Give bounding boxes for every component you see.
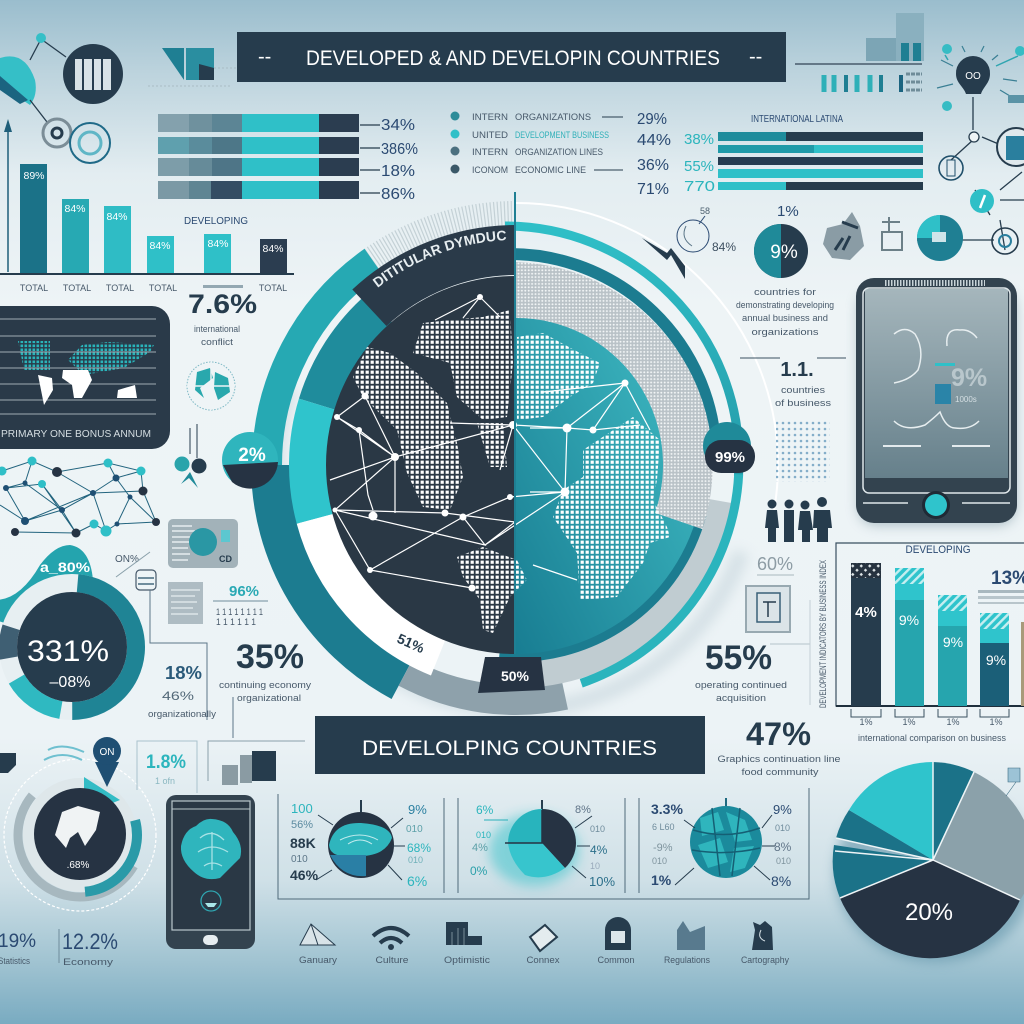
right stacked bar chart: international comparison on business <box>858 733 1006 743</box>
left bar chart: TOTAL <box>259 283 287 293</box>
stat 1.8 percent box <box>137 741 197 793</box>
stacked horizontal bars <box>158 114 418 203</box>
tab 50 percent <box>478 657 545 693</box>
large pie chart: 20% <box>905 899 953 926</box>
left bar chart: 84% <box>149 240 171 252</box>
panel: teal globe with labels: -9% <box>653 842 673 854</box>
right dotted continents <box>517 333 670 600</box>
horizontal striped bars: 770 <box>684 178 715 195</box>
stat 1.1 with dotted square <box>740 358 846 482</box>
icon: folder: Regulations <box>664 955 710 965</box>
title banner: -- <box>749 46 762 68</box>
legend with labels and percentages: ORGANIZATIONS <box>515 112 591 122</box>
small percentage icon row: 58 <box>700 206 710 216</box>
outer thin ring and shadow <box>208 162 824 778</box>
icon: triangle <box>299 924 338 965</box>
pin label: ON <box>100 747 114 758</box>
pin label <box>93 737 121 787</box>
document icon and stat: 1 1 1 1 1 1 1 1 <box>216 607 263 617</box>
stat 18 percent: 46% <box>162 689 194 703</box>
right rings <box>259 216 757 708</box>
paragraph under small pie: organizations <box>752 327 819 337</box>
title banner: DEVELOPED & AND DEVELOPIN COUNTRIES <box>306 47 720 70</box>
document icon and stat: 1 1 1 1 1 1 <box>216 617 256 627</box>
right stacked bar chart: 1% <box>859 717 873 727</box>
horizontal striped bars <box>684 114 923 195</box>
network diagram <box>0 456 160 538</box>
badge 99 percent: 99% <box>715 449 745 466</box>
vertical tiny label: DEVELOPMENT INDICATORS BY BUSINESS INDEX <box>818 560 828 708</box>
top right light bulb and node network <box>917 44 1024 254</box>
legend with labels and percentages: ECONOMIC LINE <box>515 165 586 175</box>
icon: group of people <box>765 497 832 542</box>
legend with labels and percentages: 36% <box>637 157 669 174</box>
stat 35 percent: 35% <box>236 638 304 676</box>
left bar chart: DEVELOPING <box>184 216 248 227</box>
icon: wifi <box>373 928 409 965</box>
top right building chart <box>795 13 924 92</box>
icon: dotted globe <box>187 362 235 410</box>
right stacked bar chart: 9% <box>943 634 963 650</box>
small percentage icon row <box>677 203 963 278</box>
stat 7.6 percent <box>188 289 257 347</box>
stacked horizontal bars: 86% <box>381 186 415 203</box>
panel: teal globe with labels: 8% <box>774 840 792 854</box>
left outer bands <box>185 134 847 796</box>
right stacked bar chart <box>836 543 1024 743</box>
panel: swirl circle <box>290 800 431 889</box>
developing countries banner: DEVELOLPING COUNTRIES <box>362 737 657 760</box>
title banner <box>237 32 786 82</box>
comparison panel frame <box>278 788 809 899</box>
panel: teal globe with labels: 010 <box>775 823 790 833</box>
legend with labels and percentages: INTERN <box>472 147 508 157</box>
icon: wifi: Culture <box>376 955 408 965</box>
document icon and stat <box>168 582 268 627</box>
icon: ticket <box>526 925 560 965</box>
left bar chart: TOTAL <box>20 283 48 293</box>
right stacked bar chart: 1% <box>989 717 1003 727</box>
icon: head silhouette <box>741 921 789 965</box>
panel: teal globe with labels: 010 <box>652 856 667 866</box>
stat 47 percent: Graphics continuation line <box>718 754 840 764</box>
left bar chart: 84% <box>262 243 284 255</box>
tablet device <box>856 278 1017 525</box>
title banner: -- <box>258 46 271 68</box>
panel: teal globe with labels: 9% <box>773 802 792 817</box>
bottom icon row <box>299 917 789 965</box>
stat 7.6 percent: conflict <box>201 337 234 347</box>
icon: ticket: Connex <box>526 955 560 965</box>
icon: triangle: Ganuary <box>299 955 338 965</box>
grey rock icon <box>823 212 864 260</box>
donut chart 331 percent: a_80% <box>40 559 91 575</box>
bottom left stats: 12.2% <box>62 929 118 954</box>
card icon: CD <box>219 554 232 564</box>
donut chart 331 percent: 331% <box>27 635 109 668</box>
paragraph under small pie <box>736 287 834 337</box>
stat 18 percent: 18% <box>165 663 202 683</box>
stat 1.8 percent box: 1.8% <box>146 752 186 773</box>
panel: swirl circle: 010 <box>291 854 308 865</box>
right stacked bar chart: DEVELOPING <box>906 544 970 556</box>
dark world map panel <box>0 306 170 449</box>
center divider <box>514 192 516 654</box>
stat 18 percent <box>148 663 217 719</box>
bottom left stats <box>0 929 118 967</box>
bolt icon <box>642 238 685 279</box>
icon cluster: top left globe and nodes <box>0 33 123 163</box>
stat 60 percent frame icon: 60% <box>757 554 793 574</box>
icon: speech bubbles <box>174 424 206 488</box>
panel: teal globe with labels: 8% <box>771 873 791 889</box>
donut chart 331 percent <box>0 545 146 721</box>
panel: pie chart with labels: 4% <box>472 842 488 854</box>
small percentage icon row: 84% <box>712 240 736 254</box>
stat 7.6 percent: 7.6% <box>188 289 257 319</box>
card icon <box>168 519 238 568</box>
dark left half disc <box>326 276 515 654</box>
top right light bulb and node network: OO <box>965 71 981 82</box>
donut chart 331 percent: –08% <box>50 674 90 691</box>
tablet device: 9% <box>951 364 987 392</box>
panel: pie chart with labels: 0% <box>470 864 488 878</box>
badge 2 percent <box>222 432 278 489</box>
left tick arc <box>368 213 512 261</box>
left dotted continents <box>353 310 527 633</box>
stat 1.1 with dotted square: 1.1. <box>780 359 814 381</box>
stat 35 percent <box>219 638 312 738</box>
panel: teal globe with labels: 010 <box>776 856 791 866</box>
panel: pie chart with labels: 10 <box>590 861 600 871</box>
right stacked bar chart: 9% <box>899 612 919 628</box>
left bar chart: 84% <box>64 203 86 215</box>
panel: swirl circle: 56% <box>291 819 313 831</box>
developing countries banner <box>315 716 705 774</box>
connector icon and pie <box>882 215 963 261</box>
badge 99 percent <box>703 422 755 473</box>
icon: small teal folded shape <box>148 48 236 86</box>
icon: lock <box>598 917 634 965</box>
dark world map panel: PRIMARY ONE BONUS ANNUM <box>1 428 151 440</box>
left bar chart: 84% <box>106 211 128 223</box>
paragraph under small pie: demonstrating developing <box>736 300 834 310</box>
legend with labels and percentages: 44% <box>637 132 671 149</box>
panel: pie chart with labels: 4% <box>590 843 608 857</box>
panel: swirl circle: 46% <box>290 867 319 883</box>
right stacked bar chart: 1% <box>902 717 916 727</box>
legend with labels and percentages: DEVELOPMENT BUSINESS <box>515 130 609 140</box>
legend with labels and percentages: ICONOM <box>472 165 508 175</box>
panel: teal globe with labels: 3.3% <box>651 801 683 817</box>
icon: folder <box>664 921 710 965</box>
panel: swirl circle: 6% <box>407 873 427 889</box>
label 51 percent on white ring: 51% <box>395 630 427 656</box>
teal right half disc <box>515 276 704 654</box>
stat 47 percent <box>718 716 840 777</box>
panel: teal globe with labels: 1% <box>651 872 672 888</box>
dotted grey band <box>516 262 713 529</box>
icon: city chart: Optimistic <box>444 955 491 965</box>
panel: pie chart with labels: 6% <box>476 803 494 817</box>
tab 50 percent: 50% <box>501 668 530 684</box>
left bar chart: 89% <box>23 170 45 182</box>
panel: pie chart with labels: 010 <box>590 824 605 834</box>
pie with nine percent <box>754 224 808 278</box>
stat 55 percent: acquisition <box>716 693 766 703</box>
panel: teal globe with labels <box>651 798 792 889</box>
stat 18 percent: organizationally <box>148 709 217 719</box>
paragraph under small pie: annual business and <box>742 313 828 323</box>
left bar chart: TOTAL <box>106 283 134 293</box>
badge 2 percent: 2% <box>238 445 266 466</box>
document icon and stat: 96% <box>229 583 259 600</box>
horizontal striped bars: 38% <box>684 131 714 148</box>
central circular globe graphic <box>222 192 779 716</box>
panel: swirl circle: 010 <box>406 824 423 835</box>
paragraph under small pie: countries for <box>754 287 816 297</box>
stacked horizontal bars: 34% <box>381 117 415 134</box>
left bar chart: TOTAL <box>63 283 91 293</box>
panel: swirl circle: 100 <box>291 801 313 816</box>
icon: lock: Common <box>598 955 634 965</box>
horizontal striped bars: 55% <box>684 158 714 175</box>
legend with labels and percentages: UNITED <box>472 130 509 140</box>
stat 1.8 percent box: 1 ofn <box>155 776 175 786</box>
panel: teal globe with labels: 6 L60 <box>652 822 675 832</box>
icon: head silhouette: Cartography <box>741 955 789 965</box>
stat 7.6 percent: international <box>194 324 240 334</box>
stat 60 percent frame icon <box>746 554 794 632</box>
panel: swirl circle: 68% <box>407 841 431 855</box>
small database icon with leader lines: ON% <box>115 554 139 565</box>
panel: pie chart with labels <box>470 800 615 889</box>
tablet device: 1000s <box>955 395 977 404</box>
left bar chart <box>0 119 294 293</box>
bottom left globe ring <box>0 737 165 920</box>
stat 47 percent: 47% <box>746 716 811 752</box>
stat 55 percent: operating continued <box>695 680 787 690</box>
panel: swirl circle: 010 <box>408 855 423 865</box>
panel: swirl circle: 9% <box>408 802 427 817</box>
icon: city chart <box>444 922 491 965</box>
right stacked bar chart: 9% <box>986 652 1006 668</box>
left bar chart: 84% <box>207 238 229 250</box>
right stacked bar chart: 4% <box>855 604 877 621</box>
stat 55 percent <box>695 600 810 705</box>
legend with labels and percentages: 71% <box>637 181 669 198</box>
large pie chart <box>833 762 1024 962</box>
bottom left stats: Economy <box>63 957 114 967</box>
panel: pie chart with labels: 8% <box>575 804 591 816</box>
left bar chart: TOTAL <box>149 283 177 293</box>
panel: swirl circle: 88K <box>290 835 316 851</box>
right stacked bar chart: 1% <box>946 717 960 727</box>
small percentage icon row: 1% <box>777 203 799 220</box>
network lines and nodes on globe <box>330 294 650 592</box>
legend with labels and percentages: 29% <box>637 111 667 128</box>
stat 1.1 with dotted square: countries <box>781 385 826 395</box>
bottom left globe ring: .68% <box>67 860 90 871</box>
panel: pie chart with labels: 010 <box>476 830 491 840</box>
legend with labels and percentages: ORGANIZATION LINES <box>515 147 603 157</box>
stat 55 percent: 55% <box>705 639 772 677</box>
icon: machinery box <box>208 741 305 785</box>
stat 1.1 with dotted square: of business <box>775 398 832 408</box>
legend with labels and percentages <box>450 111 671 198</box>
inner left ring segments <box>212 161 820 769</box>
stacked horizontal bars: 18% <box>381 163 415 180</box>
horizontal striped bars: INTERNATIONAL LATINA <box>751 114 843 125</box>
panel: pie chart with labels: 10% <box>589 874 615 889</box>
small database icon with leader lines <box>115 552 207 720</box>
stat 47 percent: food community <box>742 767 819 777</box>
stat 35 percent: continuing economy <box>219 680 312 690</box>
curved banner label: DITITULAR DYMDUC <box>372 230 506 288</box>
stat 35 percent: organizational <box>237 693 301 703</box>
legend with labels and percentages: INTERN <box>472 112 508 122</box>
smartphone with teal blob <box>166 795 255 949</box>
stacked horizontal bars: 386% <box>381 141 418 158</box>
pie with nine percent: 9% <box>770 242 798 263</box>
